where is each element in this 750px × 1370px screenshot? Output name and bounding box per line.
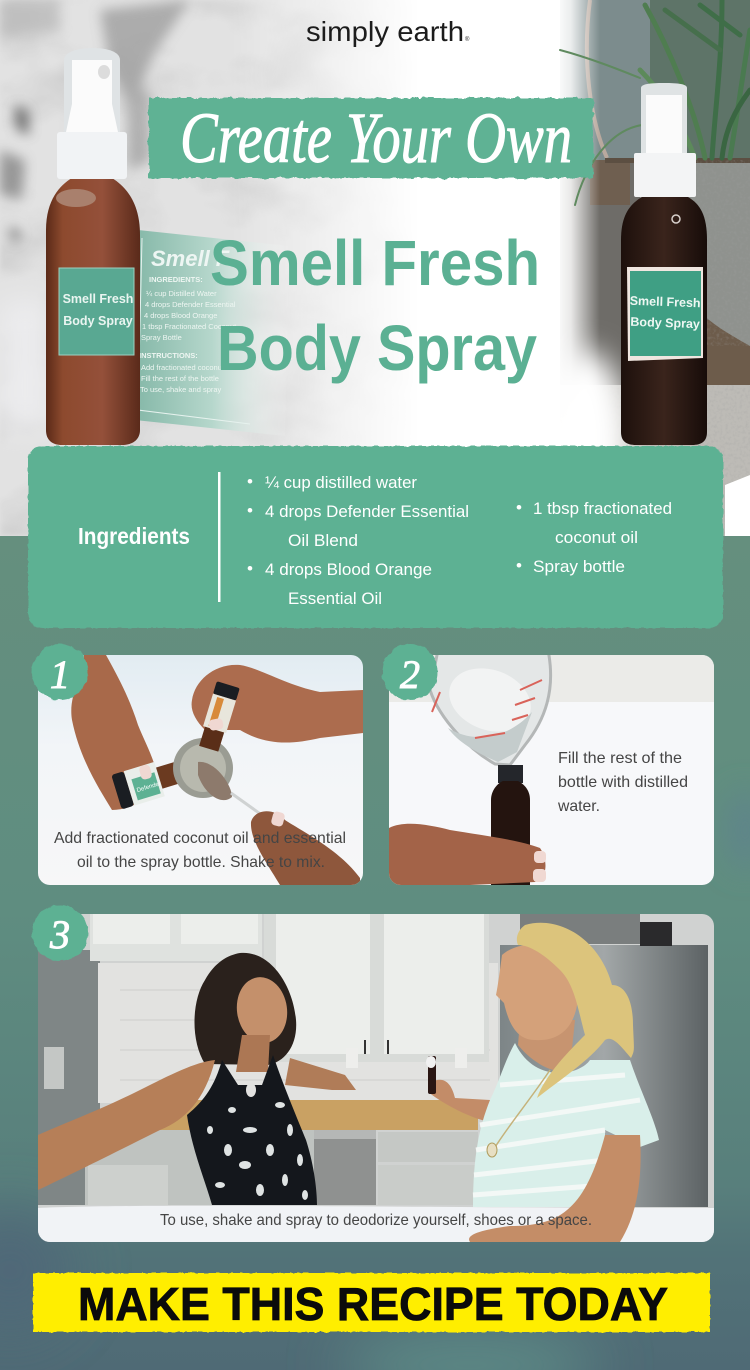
metal plant pot [640, 160, 750, 346]
title: Smell Fresh [210, 227, 540, 299]
neck and face [518, 1020, 575, 1071]
necklace [496, 1070, 550, 1146]
page background [0, 535, 750, 1370]
ingredients list left: ¼ cup distilled water [265, 473, 417, 492]
lower cabinets [85, 1130, 315, 1205]
recipe card behind bottle: To use, shake and spray [140, 385, 222, 394]
right spray bottle: Body Spray [630, 315, 700, 331]
left hand [71, 655, 158, 810]
ingredients list right: 1 tbsp fractionated [533, 499, 672, 518]
ingredients list right: • [516, 556, 522, 575]
woman 1 [38, 953, 356, 1205]
badge: step 2 [382, 644, 438, 700]
plant leaves [640, 0, 750, 158]
lower bottle [112, 762, 178, 809]
shirt [473, 1043, 659, 1207]
right spray bottle [621, 83, 707, 445]
left spray bottle: Body Spray [63, 314, 133, 328]
ingredients list left: • [247, 559, 253, 578]
recipe card behind bottle: Spray Bottle [141, 333, 182, 342]
lower bottle: Defender [136, 781, 162, 794]
ingredients list left: 4 drops Defender Essential [265, 502, 469, 521]
ingredients list right: • [516, 498, 522, 517]
ingredients list left: • [247, 472, 253, 491]
upper cabinets [90, 914, 262, 961]
near arm [38, 1060, 215, 1190]
ingredients list right [516, 498, 672, 576]
left spray bottle [46, 48, 140, 445]
ingredients list left: Oil Blend [288, 531, 358, 550]
badge: step 3: 3 [49, 912, 70, 957]
step 1 caption: oil to the spray bottle. Shake to mix. [77, 854, 325, 871]
lower right hand [251, 811, 360, 885]
recipe card behind bottle: Add fractionated coconut [141, 363, 225, 372]
recipe card behind bottle: 4 drops Blood Orange [144, 311, 217, 320]
panel: step 3 photo [38, 914, 714, 1242]
blonde hair [517, 923, 634, 1098]
ingredients list left: Essential Oil [288, 589, 382, 608]
badge: step 2: 2 [400, 652, 420, 697]
badge: step 1 [32, 644, 88, 700]
step 2 caption [557, 750, 688, 815]
hero photo: marble and counter background [0, 0, 750, 536]
step 2 caption: Fill the rest of the [558, 750, 682, 767]
butcher block counter [156, 1100, 478, 1130]
recipe card behind bottle: INGREDIENTS: [149, 275, 203, 284]
loose plant fronds [560, 50, 642, 205]
raised arm [428, 1080, 490, 1122]
recipe card behind bottle: INSTRUCTIONS: [139, 351, 198, 360]
lower arm [469, 1135, 641, 1242]
title [210, 227, 540, 384]
panel: step 1 photo [38, 655, 363, 885]
back wall tiles [98, 963, 498, 1103]
face [236, 977, 288, 1042]
step 3 caption: To use, shake and spray to deodorize yourself, shoes or a space. [160, 1212, 592, 1229]
badge: step 1: 1 [50, 652, 70, 697]
ingredients heading: Ingredients [78, 523, 190, 549]
woman 2 [426, 923, 659, 1242]
white table strip [38, 1206, 714, 1242]
panel: step 2 photo [389, 650, 714, 885]
hair [194, 953, 296, 1065]
ingredients list right: coconut oil [555, 528, 638, 547]
step 2 caption: bottle with distilled [558, 774, 688, 791]
step 1 caption: Add fractionated coconut oil and essential [54, 830, 346, 847]
ingredients list left: 4 drops Blood Orange [265, 560, 432, 579]
ingredients list left: • [247, 501, 253, 520]
brush banner heading: Create Your Own [180, 98, 572, 178]
ingredients list left [247, 472, 469, 608]
left spray bottle: Smell Fresh [63, 292, 133, 306]
mixing bowl [173, 738, 233, 798]
title: Body Spray [217, 312, 537, 384]
recipe card behind bottle: Fill the rest of the bottle [141, 374, 219, 383]
panel: ingredients [28, 446, 723, 628]
call to action banner: MAKE THIS RECIPE TODAY [78, 1278, 668, 1330]
brand logo: simply earth [306, 16, 464, 47]
spoon [198, 762, 232, 800]
far arm [285, 1058, 356, 1090]
metal siding [38, 950, 100, 1205]
recipe card behind bottle: 1 tbsp Fractionated Coconut [142, 322, 237, 331]
recipe card behind bottle: Smell F [151, 246, 230, 271]
right spray bottle: Smell Fresh [629, 294, 701, 310]
recipe card behind bottle [135, 230, 290, 436]
brand logo: ® [465, 36, 470, 43]
step 2 caption: water. [557, 798, 600, 815]
hand [389, 824, 545, 885]
refrigerator [500, 945, 708, 1207]
measuring cup [430, 650, 551, 765]
badge: step 3 [32, 905, 88, 961]
upper hand and bottle [192, 665, 363, 743]
dress [187, 1055, 317, 1205]
amber bottle [491, 765, 530, 885]
recipe card behind bottle: ¼ cup Distilled Water [146, 289, 217, 298]
right wall, plant, pot and granite counter [543, 0, 750, 536]
ingredients list right: Spray bottle [533, 557, 625, 576]
step 1 caption [54, 830, 346, 871]
recipe card behind bottle: 4 drops Defender Essential [145, 300, 236, 309]
